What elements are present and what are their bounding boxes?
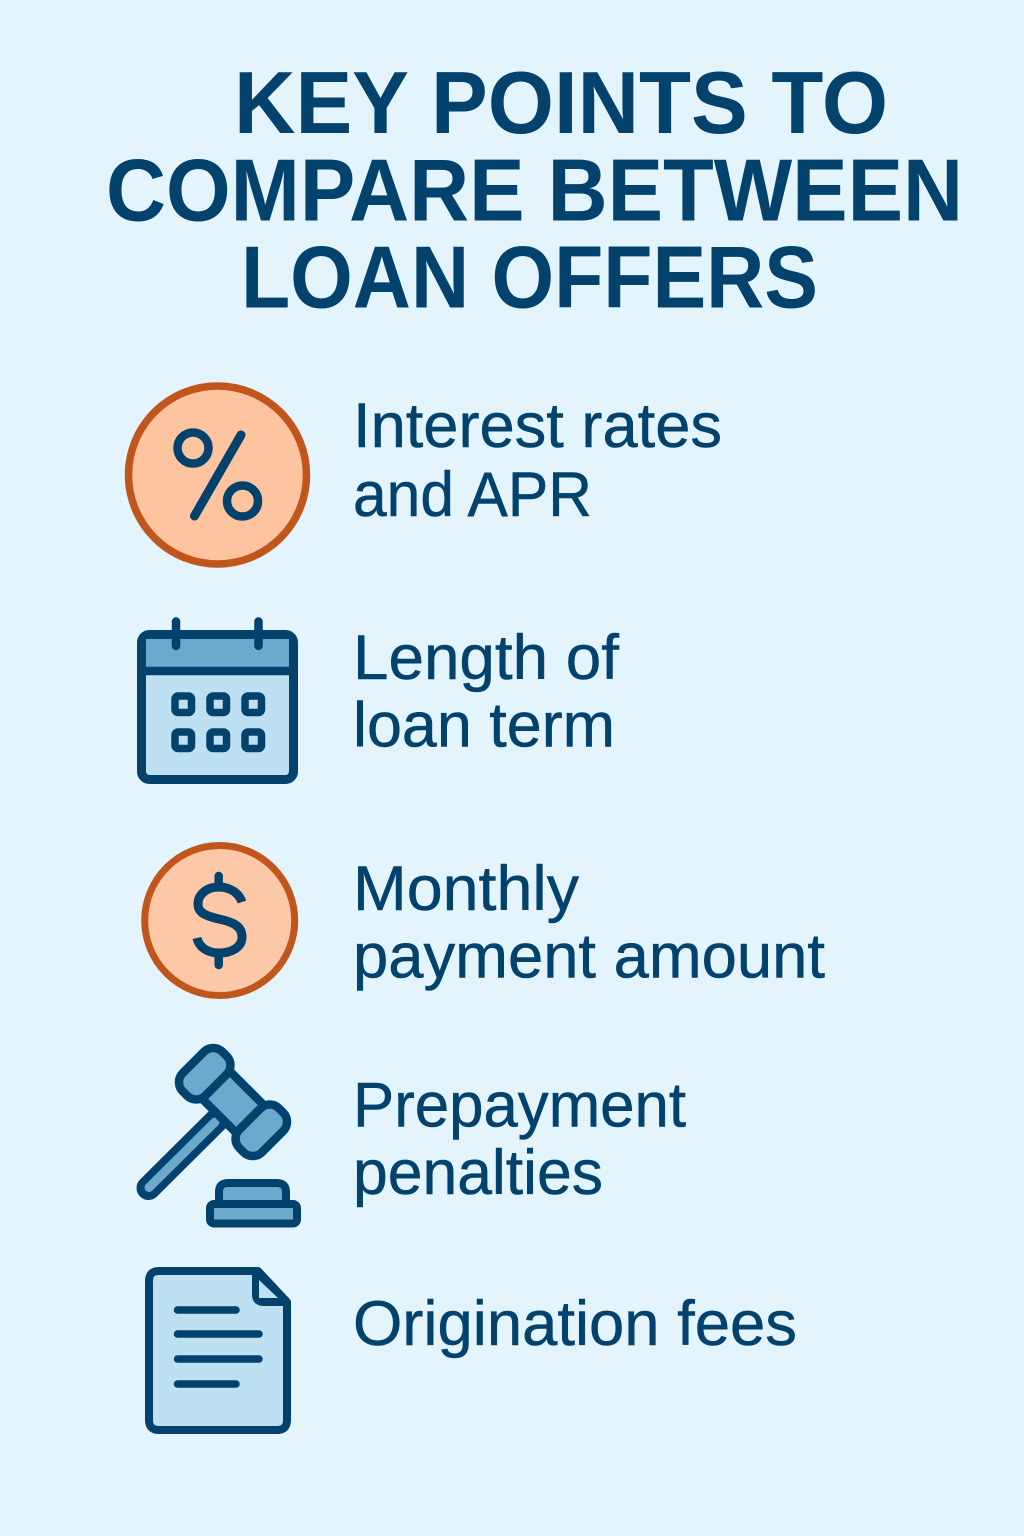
- icon: gavel: [148, 1043, 297, 1224]
- icon: percent coin: [128, 386, 306, 564]
- item: origination fees: [149, 1267, 797, 1430]
- title: LOAN OFFERS: [241, 228, 818, 326]
- label: length of loan term: Length of: [353, 623, 619, 693]
- label: prepayment penalties: [353, 1070, 686, 1208]
- title: COMPARE BETWEEN: [106, 140, 963, 240]
- icon: calendar: [141, 622, 294, 780]
- label: prepayment penalties: Prepayment: [353, 1070, 686, 1140]
- item: prepayment penalties: [148, 1043, 686, 1224]
- title: KEY POINTS TO: [234, 53, 888, 152]
- title: [106, 53, 963, 326]
- item: length of loan term: [141, 622, 619, 780]
- label: prepayment penalties: penalties: [353, 1138, 603, 1208]
- icon: document: [149, 1267, 291, 1430]
- label: length of loan term: loan term: [353, 690, 615, 760]
- label: interest rates and APR: and APR: [353, 460, 592, 530]
- label: monthly payment amount: Monthly: [353, 854, 580, 924]
- label: interest rates and APR: [353, 391, 722, 530]
- item: monthly payment amount: [145, 846, 825, 996]
- label: monthly payment amount: payment amount: [353, 922, 825, 992]
- icon: dollar coin: [145, 846, 295, 996]
- label: length of loan term: [353, 623, 619, 760]
- label: monthly payment amount: [353, 854, 825, 992]
- label: interest rates and APR: Interest rates: [353, 391, 722, 461]
- item: interest rates and APR: [128, 386, 722, 564]
- label: origination fees: Origination fees: [353, 1289, 797, 1359]
